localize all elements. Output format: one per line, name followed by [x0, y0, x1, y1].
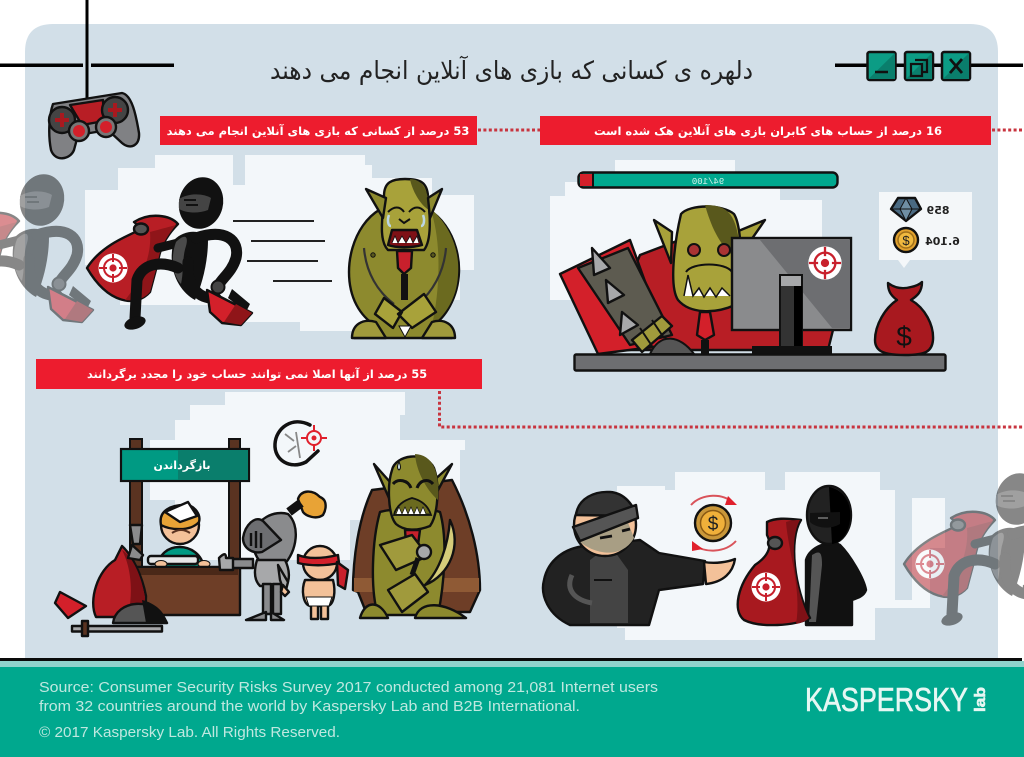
- background panel: [25, 24, 998, 660]
- shop stall: [121, 439, 249, 615]
- bottom rule: [0, 658, 1022, 661]
- red loot sack: [93, 525, 146, 617]
- icon: money bag: $: [896, 321, 912, 352]
- faded thief left: [0, 169, 93, 329]
- callout: inventory: [879, 192, 972, 268]
- desk: [574, 354, 946, 370]
- logo: Kaspersky lab: lab: [972, 687, 989, 712]
- window buttons: [868, 52, 970, 80]
- label: 55 percent: [36, 359, 482, 389]
- health bar: 94/100: [692, 177, 724, 187]
- label: 55 percent: 55 درصد از آنها اصلا نمی توانند حساب خود را مجدد برگردانند: [87, 367, 427, 381]
- title: دلهره ی کسانی که بازی های آنلاین انجام می دهند: [270, 55, 753, 86]
- fallen helmet: [113, 600, 167, 623]
- crying orc: [349, 179, 459, 338]
- dotted connector middle: [440, 391, 1024, 427]
- icon: game controller: [49, 93, 139, 158]
- mirrored count 859: 859: [927, 204, 949, 217]
- thief running with bag: [87, 172, 252, 332]
- label: 53 percent: [160, 116, 477, 145]
- hooded accomplice: [543, 492, 735, 625]
- dotted connector top: [478, 128, 540, 132]
- coin with exchange arrows: $: [708, 514, 719, 535]
- footer band: [0, 667, 1024, 757]
- footer source text: © 2017 Kaspersky Lab. All Rights Reserved.: [39, 725, 340, 741]
- knight: [219, 492, 326, 620]
- label: 53 percent: 53 درصد از کسانی که بازی های آنلاین انجام می دهند: [167, 124, 469, 138]
- footer source text: from 32 countries around the world by Kaspersky Lab and B2B International.: [39, 699, 580, 715]
- orc at computer: [560, 205, 851, 354]
- window control line: [835, 64, 1023, 67]
- pixel clouds: [85, 155, 945, 640]
- label: 16 percent: 16 درصد از حساب های کابران بازی های آنلاین هک شده است: [594, 124, 942, 138]
- dotted connector right: [992, 128, 1024, 132]
- sad orc with robe: [353, 454, 480, 618]
- icon: money bag: [875, 282, 933, 355]
- mirrored count 6.104: 6.104: [925, 235, 960, 248]
- top left window frame lines: [0, 0, 174, 100]
- shop stall: بازگرداندن: [153, 459, 211, 472]
- health bar: [578, 172, 838, 188]
- red fragment: [55, 592, 86, 618]
- thief with bag: [738, 486, 866, 625]
- logo: Kaspersky lab: KASPERSKY: [805, 681, 968, 718]
- label: 16 percent: [540, 116, 991, 145]
- faded thief right: [904, 468, 1024, 628]
- icon: coin: $: [902, 233, 910, 248]
- footer source text: Source: Consumer Security Risks Survey 2017 conducted among 21,081 Internet users: [39, 680, 658, 696]
- icon: diamond: [891, 198, 921, 221]
- baby with headband: [298, 546, 348, 619]
- sword on ground: [72, 621, 162, 636]
- shopkeeper: [148, 502, 210, 568]
- footer source text: [39, 680, 658, 741]
- footer strip: [0, 661, 1024, 667]
- clock with target: [275, 422, 327, 465]
- speed lines: [233, 221, 332, 281]
- coin with exchange arrows: [691, 496, 737, 551]
